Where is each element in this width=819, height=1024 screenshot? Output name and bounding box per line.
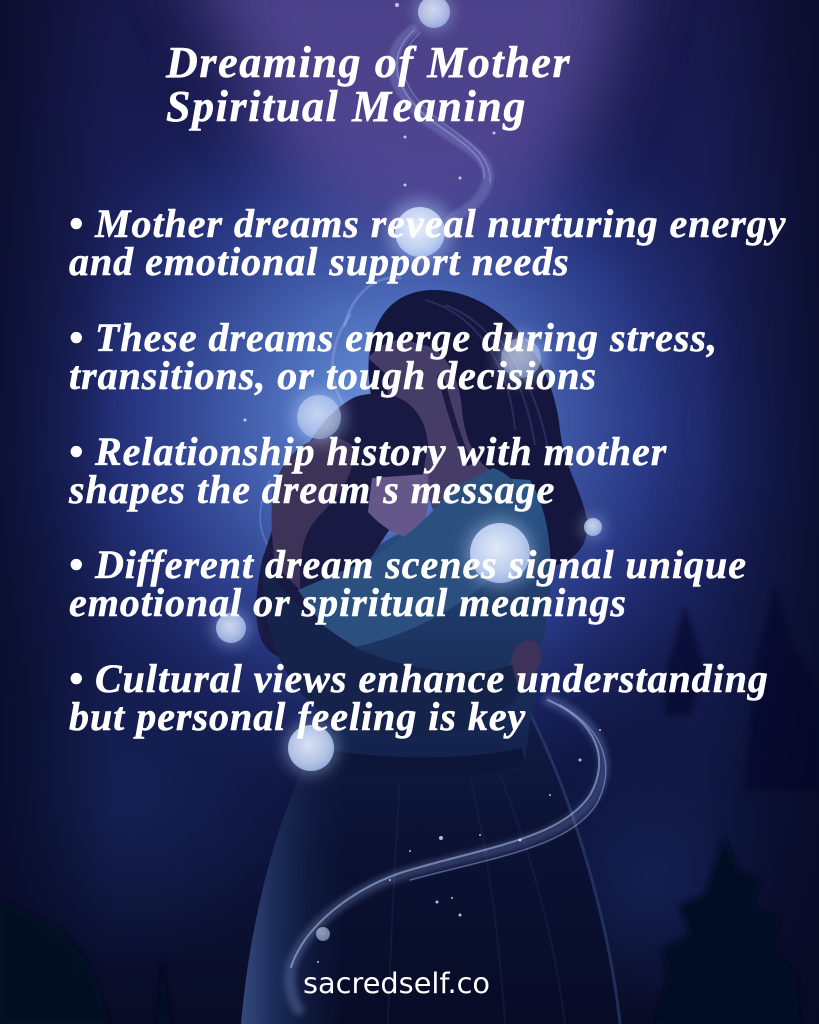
bullet: stress and transitions [69, 315, 718, 398]
daughter's face [368, 474, 429, 538]
bullet: dream scenes: • Different dream scenes signal unique [69, 542, 747, 587]
bullet: dream scenes: emotional or spiritual meanings [69, 580, 627, 625]
bullet: relationship history: shapes the dream's message [69, 467, 555, 512]
footer website: sacredself.co [303, 966, 490, 1000]
mother's sleeve across daughter [298, 468, 524, 650]
bullet: stress and transitions: • These dreams emerge during stress, [69, 315, 718, 360]
bullet: relationship history: • Relationship history with mother [69, 429, 667, 474]
bullet: cultural views: but personal feeling is key [69, 694, 526, 739]
glowing orbs [213, 0, 604, 941]
bullet: relationship history [68, 429, 667, 512]
swirl of light, upper [260, 30, 490, 570]
bullet: nurturing energy [69, 201, 786, 284]
bullet: cultural views [69, 656, 769, 739]
daughter's back and arm [262, 560, 520, 736]
swirl of light, lower [290, 700, 606, 1010]
sparkles [244, 3, 601, 963]
hands [272, 437, 541, 695]
title: Dreaming of Mother [166, 38, 571, 87]
mother's dress skirt [241, 710, 620, 1024]
mother's face and neck [368, 340, 490, 510]
daughter's hair [256, 394, 428, 660]
bullet: dream scenes [69, 542, 747, 625]
bullet: stress and transitions: transitions, or tough decisions [69, 353, 597, 398]
title [165, 38, 571, 131]
bullet: nurturing energy: and emotional support needs [69, 239, 570, 284]
mother's long hair [368, 290, 587, 566]
title: Spiritual Meaning [166, 82, 527, 131]
silhouetted trees [0, 585, 819, 1024]
bullet: cultural views: • Cultural views enhance understanding [69, 656, 769, 701]
mother's bodice and arm [300, 475, 551, 777]
bullet: nurturing energy: • Mother dreams reveal nurturing energy [69, 201, 786, 246]
